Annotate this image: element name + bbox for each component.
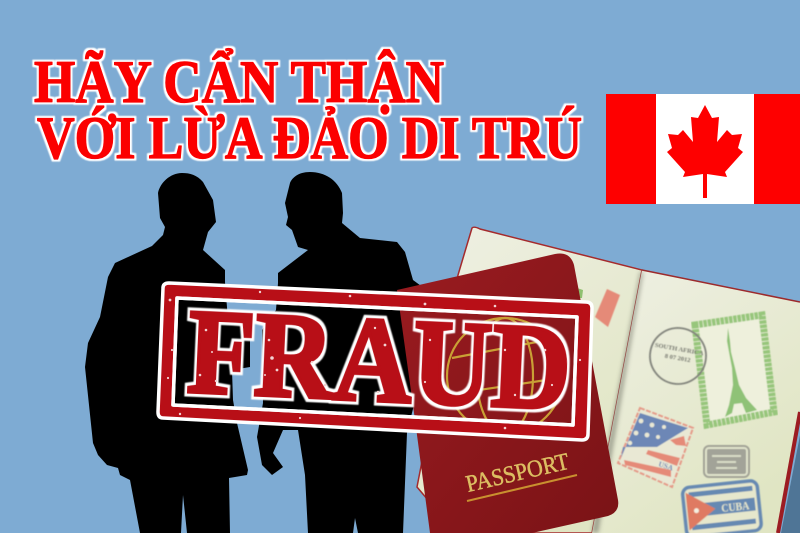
page shadow [781, 425, 800, 533]
stamp: Cuba: CUBA [721, 498, 750, 515]
icon: Canadian flag [606, 94, 800, 204]
fraud stamp [158, 283, 592, 440]
stamp: Cuba [682, 480, 762, 533]
stamp: USA flag [618, 408, 693, 487]
silhouette: left man [85, 173, 250, 533]
stamp: round South Africa [646, 324, 710, 388]
stamp: green Eiffel Tower [695, 315, 774, 425]
stamp frame [158, 283, 592, 440]
title [34, 49, 582, 171]
stamp inner border [173, 298, 577, 425]
passport underline [467, 475, 577, 501]
stamp: grey label [704, 446, 749, 477]
page right edge [778, 412, 800, 533]
open passport [417, 227, 800, 533]
passport spine [592, 272, 643, 533]
passport label: PASSPORT [464, 449, 572, 498]
left passport page [417, 227, 642, 533]
stamp: coral rectangle [595, 289, 620, 327]
page top edge [642, 270, 800, 302]
passport cover [397, 253, 618, 533]
stamp: USA flag: USA [657, 459, 675, 473]
title: VỚI LỪA ĐẢO DI TRÚ [37, 105, 582, 171]
stamp wear specks [167, 291, 581, 429]
stamp word: FRAUD [185, 285, 574, 437]
silhouette: right man [257, 172, 440, 533]
stamp: round South Africa: 8 07 2012 [664, 353, 691, 364]
stamp: round South Africa: SOUTH AFRICA [654, 342, 704, 357]
title: HÃY CẨN THẬN [34, 49, 444, 115]
stamp: green fragment [577, 288, 583, 298]
right passport page [592, 270, 800, 533]
globe emblem [447, 318, 563, 434]
